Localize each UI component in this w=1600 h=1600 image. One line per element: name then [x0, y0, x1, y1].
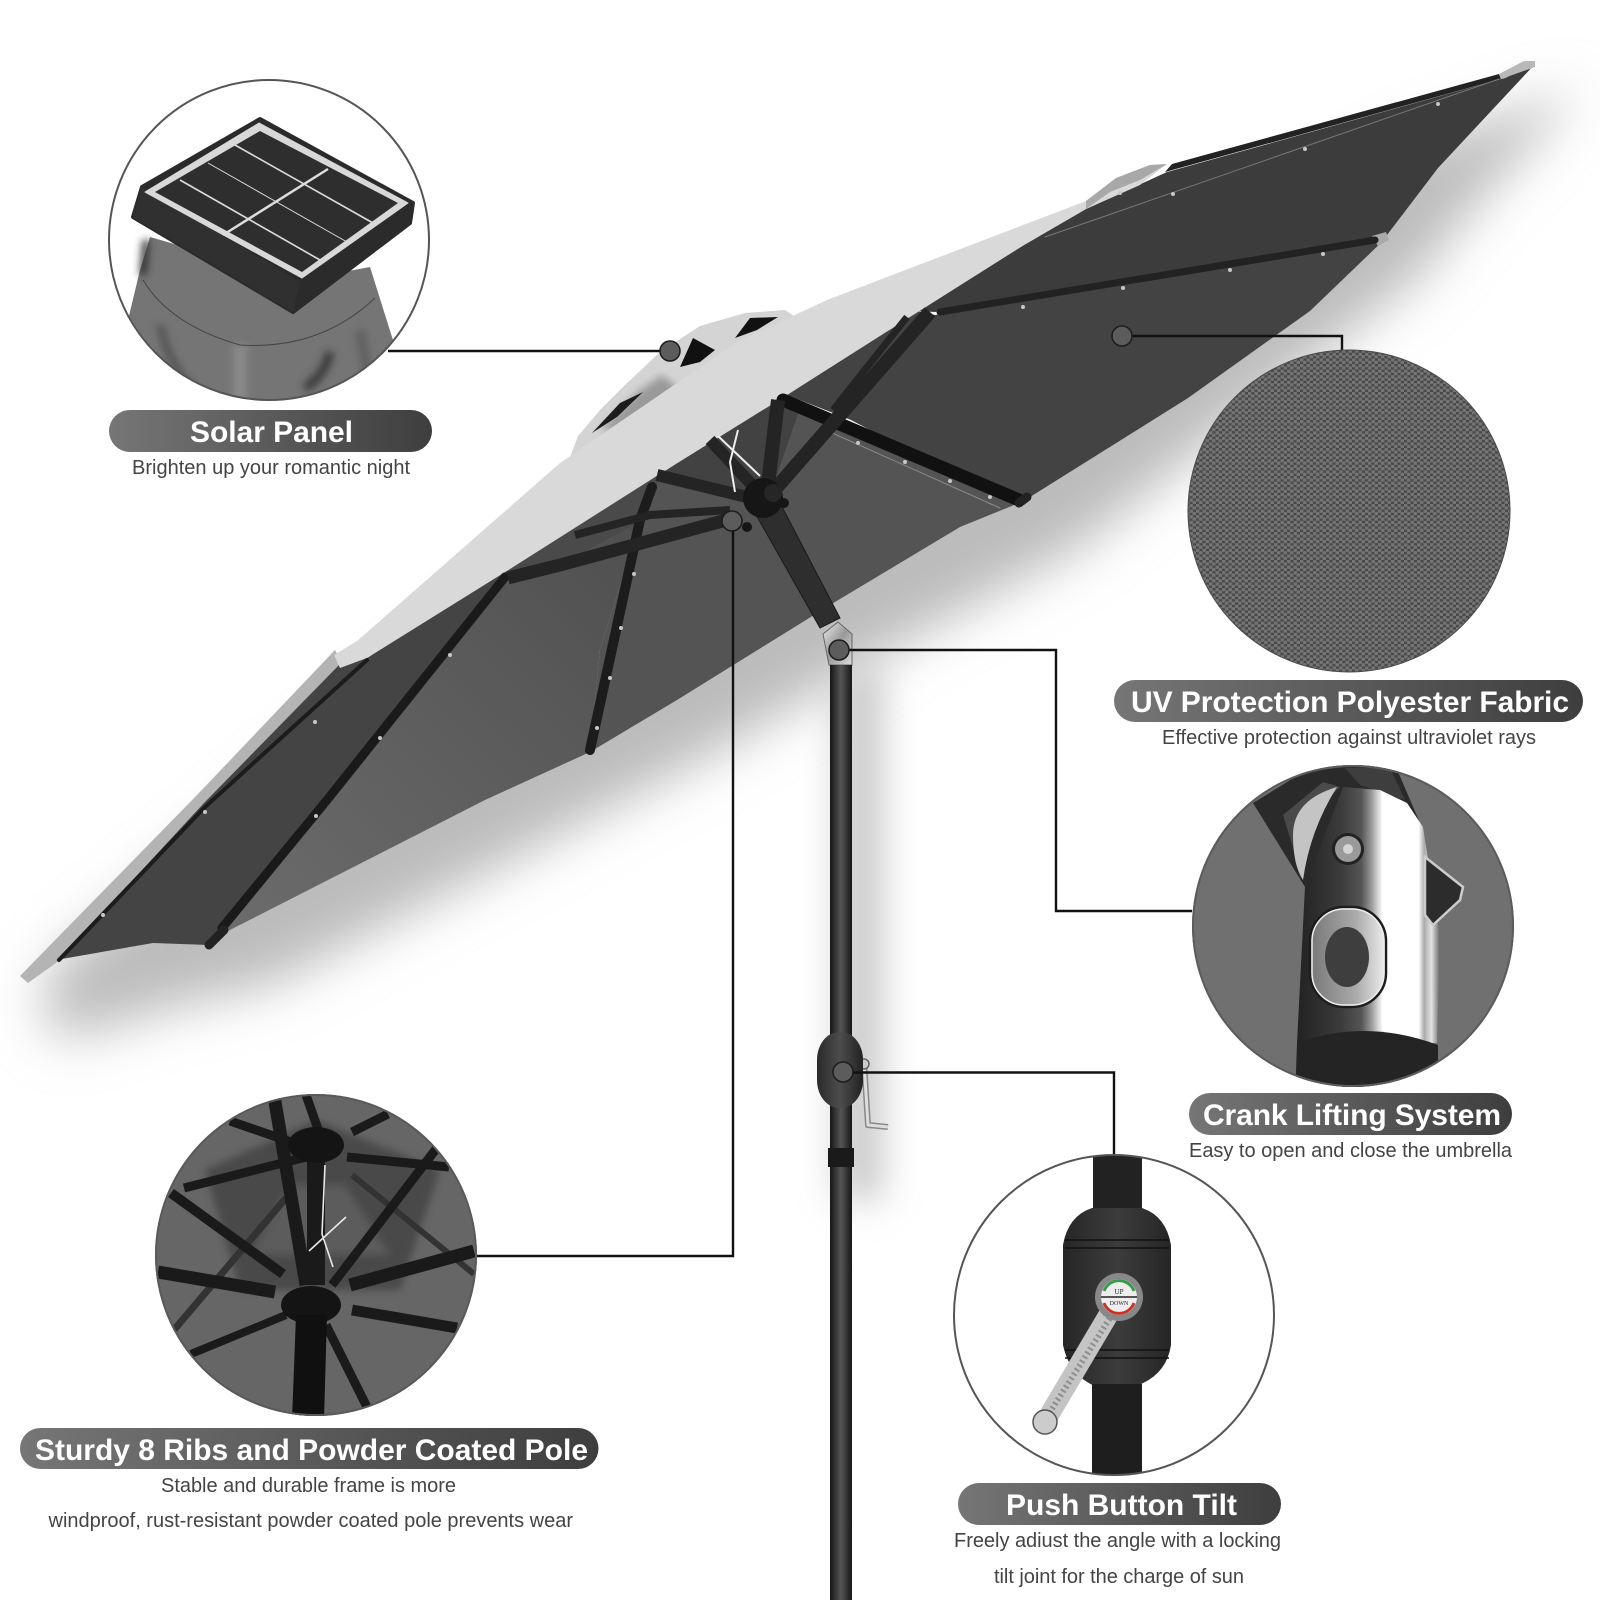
canopy shadow — [40, 90, 1580, 1040]
white cord — [309, 1165, 346, 1267]
panel: push button tilt — [954, 1150, 1281, 1588]
canopy outer light band — [334, 164, 1167, 668]
ribs description line two: windproof, rust-resistant powder coated pole prevents wear — [48, 1510, 573, 1532]
canopy window left of hub — [500, 465, 663, 580]
rib tip right — [1372, 232, 1389, 246]
canopy inner dark region near hub — [663, 395, 800, 500]
crank description: Easy to open and close the umbrella — [1189, 1140, 1513, 1162]
panel: ribs and pole — [20, 1090, 598, 1532]
inner canopy shade — [205, 1120, 440, 1290]
ribs detail circle — [155, 1090, 477, 1420]
main struts — [158, 1090, 474, 1407]
silver crank arm — [1045, 1297, 1119, 1422]
pill heading: tilt: Push Button Tilt — [1006, 1489, 1237, 1522]
lower hub — [281, 1286, 341, 1324]
panel: crank lifting — [1189, 760, 1514, 1162]
ribs description line one: Stable and durable frame is more — [161, 1475, 456, 1497]
tilt arm — [755, 503, 840, 628]
upper hub — [288, 1127, 344, 1163]
push button — [1310, 907, 1386, 1007]
tilt detail circle — [954, 1150, 1274, 1484]
canopy underside lower left panel — [224, 520, 640, 933]
central hub — [742, 478, 789, 532]
up down badge: DOWN — [1110, 1301, 1129, 1307]
marker dots — [660, 326, 1132, 1082]
pole collar — [828, 1148, 854, 1167]
tilt pole bottom — [1092, 1384, 1142, 1484]
canopy fold near right — [1086, 164, 1167, 209]
solar panel body — [133, 119, 413, 312]
pill heading: solar panel — [109, 410, 432, 452]
pill heading: solar panel: Solar Panel — [190, 416, 353, 449]
tilt description line one: Freely adiust the angle with a locking — [954, 1530, 1281, 1552]
panel: fabric — [1114, 350, 1583, 749]
up down badge: UP — [1115, 1288, 1124, 1296]
pole shadow — [838, 670, 882, 1200]
up down badge — [1095, 1273, 1143, 1321]
bolt — [1332, 833, 1364, 865]
canopy dark strip to right tip — [1165, 74, 1501, 172]
crank detail circle — [1192, 760, 1514, 1100]
solar detail circle — [108, 79, 430, 420]
solar panel description: Brighten up your romantic night — [132, 457, 410, 479]
chrome crescent — [1293, 787, 1337, 880]
pill heading: tilt — [958, 1483, 1281, 1525]
pill heading: fabric: UV Protection Polyester Fabric — [1131, 686, 1569, 719]
fabric weave circle — [1188, 350, 1510, 672]
support cords — [718, 430, 760, 492]
leader lines — [388, 336, 1342, 1256]
main pole — [830, 665, 852, 1600]
canopy underside centre panel — [590, 400, 1019, 752]
push button highlight — [1312, 909, 1384, 1005]
canopy light edge left — [20, 650, 342, 983]
tilt housing — [1063, 1208, 1171, 1388]
push button core — [1325, 927, 1369, 987]
canopy underside far right panel — [917, 64, 1535, 312]
black pole base — [1296, 1031, 1438, 1087]
pill heading: ribs: Sturdy 8 Ribs and Powder Coated Pole — [35, 1434, 588, 1467]
silver tilt joint — [823, 622, 852, 665]
upper dark joint — [1253, 760, 1420, 887]
LED lights — [101, 102, 1440, 917]
chrome tube — [1297, 787, 1440, 1043]
right clasp — [1425, 857, 1463, 925]
umbrella struts — [508, 312, 930, 578]
crank housing — [817, 1032, 863, 1108]
crank handle small — [859, 1059, 888, 1127]
panel: solar panel — [108, 79, 432, 479]
tilt description line two: tilt joint for the charge of sun — [994, 1566, 1244, 1588]
solar panel cells — [155, 131, 398, 272]
pill heading: crank: Crank Lifting System — [1203, 1099, 1501, 1132]
fabric under solar panel — [129, 237, 393, 399]
canopy right tip — [1499, 61, 1535, 79]
tilt pole top — [1093, 1156, 1142, 1208]
secondary struts — [173, 1175, 474, 1331]
canopy top vent — [569, 310, 800, 460]
canopy underside near right panel — [787, 237, 1387, 503]
crank end knob — [1033, 1410, 1057, 1434]
pole seen from below — [292, 1315, 327, 1420]
ribs along canopy — [59, 79, 1499, 960]
fabric description: Effective protection against ultraviolet rays — [1162, 727, 1536, 749]
canopy underside far left panel — [56, 570, 505, 960]
solar panel frame — [145, 123, 408, 278]
